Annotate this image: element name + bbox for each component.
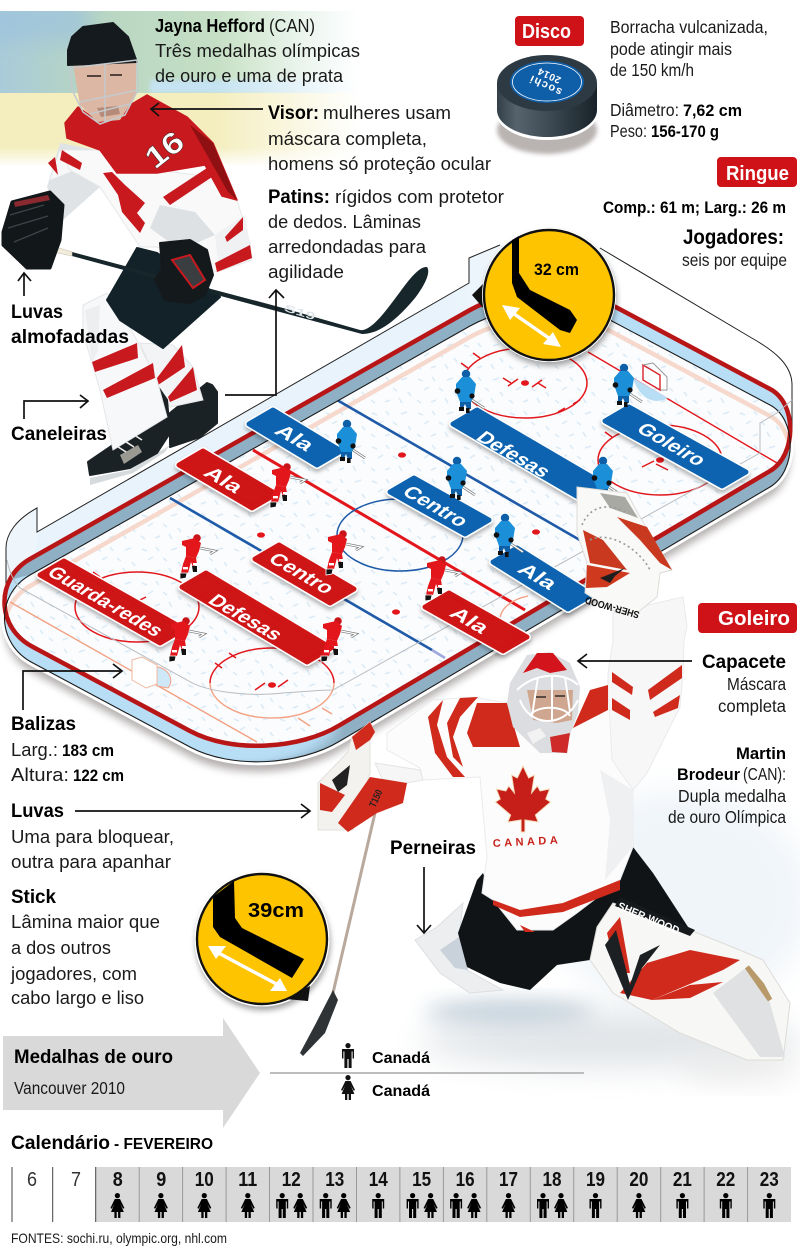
text: Patins (268, 186, 504, 282)
text: Stick: cabo largo e liso (11, 987, 144, 1008)
text: Capacete (702, 651, 786, 716)
badge: Disco: Disco (522, 21, 571, 43)
text: Stick: Stick (11, 886, 56, 908)
day 18: 18 (542, 1169, 562, 1191)
rink labels (40, 407, 746, 662)
label: Centro (red): Centro (263, 549, 339, 598)
text: Capacete: Capacete (702, 651, 786, 673)
left leg (83, 293, 167, 450)
face-off circles (75, 348, 722, 690)
day 16 (450, 1169, 481, 1218)
arrow: skates (225, 290, 284, 395)
text: Stick: jogadores, com (10, 963, 137, 984)
text: Patins: de dedos. Lâminas (268, 211, 421, 232)
blue team players (336, 364, 642, 557)
rink glass enclosure (6, 245, 792, 620)
day 16: 16 (456, 1169, 475, 1191)
text: Balizas: 183 cm (62, 741, 114, 760)
label: Ala (blue top) (249, 410, 341, 465)
stick blade callout: 32 cm (472, 228, 616, 362)
text: players: Jogadores: (683, 226, 784, 249)
text: Patins: rígidos com protetor (335, 186, 504, 207)
text: puck description: 7,62 cm (683, 101, 742, 120)
goal creases (633, 378, 668, 401)
blue lines (170, 498, 432, 650)
text: Jayna Hefford: Jayna Hefford (155, 16, 265, 36)
text: Martin Brodeur: Dupla medalha (678, 786, 786, 806)
label: Ala (red bottom) (425, 593, 527, 651)
goal lines (588, 352, 777, 463)
gold medals arrow panel: Vancouver 2010 (14, 1078, 125, 1098)
rink rim (4, 291, 790, 746)
badge: Goleiro (698, 603, 797, 633)
text: Jayna Hefford: Três medalhas olímpicas (155, 40, 360, 61)
day 9 (154, 1169, 168, 1218)
left glove (3, 192, 63, 268)
text: Jayna Hefford: de ouro e uma de prata (155, 65, 344, 86)
day 11: 11 (238, 1169, 257, 1191)
day 19 (586, 1169, 605, 1218)
arrow: gloves (18, 273, 31, 296)
text: Balizas: Larg.: (11, 739, 58, 760)
ice shadows (420, 790, 800, 1079)
rink boards (4, 291, 790, 762)
puck logo: sochi (528, 72, 564, 98)
blocker glove: T150 (368, 788, 385, 809)
text: Jayna Hefford: (CAN) (269, 15, 315, 36)
day 17 (499, 1169, 518, 1218)
arrow: goalie gloves (75, 804, 310, 818)
text: Patins: Patins: (268, 186, 330, 208)
day 9: 9 (156, 1169, 166, 1191)
day 7: 7 (71, 1169, 81, 1191)
text: Stick (10, 886, 160, 1008)
badge: Ringue: Ringue (726, 163, 789, 185)
badge: Ringue (717, 157, 797, 187)
text: Stick: Lâmina maior que (11, 911, 160, 932)
day 15: 15 (412, 1169, 431, 1191)
goalie stick (300, 813, 375, 1056)
text: puck description: Diâmetro: (610, 100, 679, 120)
mask (507, 652, 580, 753)
right leg pad: SHER-WOOD (616, 900, 681, 937)
label: Ala (blue top): Ala (269, 421, 320, 455)
calendar (12, 1167, 791, 1222)
text: puck description: de 150 km/h (610, 60, 694, 80)
sources: FONTES: sochi.ru, olympic.org, nhl.com (11, 1230, 227, 1246)
text: Capacete: Máscara (727, 674, 786, 694)
day 17: 17 (499, 1169, 518, 1191)
day 13 (320, 1169, 351, 1218)
label: Ala (blue bottom): Ala (512, 560, 563, 594)
text: Capacete: completa (718, 696, 786, 716)
right glove (155, 240, 213, 303)
text: Visor: homens só proteção ocular (268, 153, 491, 174)
text: puck description: Borracha vulcanizada, (610, 17, 768, 37)
calendar heading (11, 1132, 213, 1154)
calendar heading: - FEVEREIRO (114, 1136, 213, 1153)
day 21 (673, 1169, 692, 1218)
chest maple leaf (103, 172, 145, 233)
puck logo (510, 61, 584, 103)
text: Luvas goalie (11, 800, 174, 872)
day 19: 19 (586, 1169, 605, 1191)
photo: skater Jayna Hefford: S19 (283, 303, 317, 323)
day 23: 23 (760, 1169, 779, 1191)
raised sleeve (600, 597, 687, 847)
text: Luvas almofadadas: Luvas (11, 301, 63, 323)
text: Visor: mulheres usam (323, 102, 451, 123)
text: Patins: agilidade (268, 261, 344, 282)
badge: Disco (515, 16, 584, 46)
text: Visor: máscara completa, (268, 128, 427, 149)
gold medal winners (270, 1043, 584, 1100)
text: Balizas (11, 713, 124, 785)
photo: goalie Martin Brodeur (300, 487, 800, 1079)
day 21: 21 (673, 1169, 692, 1191)
text: Luvas almofadadas (11, 301, 129, 348)
center circle (337, 499, 463, 571)
day 11 (238, 1169, 257, 1218)
label: Goleiro (blue) (605, 407, 746, 486)
label: Ala (red top): Ala (198, 463, 249, 497)
blocker glove (318, 722, 423, 832)
pants (458, 847, 690, 990)
text: Balizas: 122 cm (73, 766, 124, 785)
day 14 (369, 1169, 388, 1218)
goal net left (132, 657, 157, 688)
text: Luvas goalie: Luvas (11, 800, 64, 822)
badge: Goleiro: Goleiro (718, 608, 790, 630)
day 23 (760, 1169, 779, 1218)
jersey white body (60, 150, 252, 272)
day 6: 6 (27, 1169, 37, 1191)
text: Martin Brodeur: (CAN): (743, 764, 786, 784)
text: Stick: a dos outros (11, 937, 111, 958)
text: players (682, 226, 787, 270)
label: Defesas (blue): Defesas (471, 428, 556, 481)
right leg pad (590, 897, 790, 1060)
right skate (170, 383, 217, 447)
label: Centro (red) (255, 545, 354, 603)
jersey red yoke (65, 95, 237, 200)
left leg pad (415, 903, 503, 993)
text: Martin Brodeur: Martin (736, 744, 786, 763)
label: Centro (blue): Centro (397, 482, 473, 531)
arrow: helmet (578, 654, 692, 668)
text: Luvas goalie: Uma para bloquear, (11, 826, 174, 847)
stick blade callout: 32 cm: 32 cm (534, 260, 579, 279)
text: Patins: arredondadas para (268, 236, 427, 257)
text: puck description: Peso: (610, 121, 647, 141)
arrow: leg pads (417, 867, 431, 933)
stick blade callout: 39cm: 39cm (248, 900, 304, 922)
text: Luvas almofadadas: almofadadas (11, 326, 129, 348)
right leg (140, 343, 203, 407)
stick blade callout: 39cm (194, 872, 330, 1006)
day 20 (629, 1169, 648, 1218)
neutral zone dots (257, 380, 664, 688)
red team players (169, 463, 460, 662)
text: Luvas goalie: outra para apanhar (11, 851, 171, 872)
text: Jayna Hefford (155, 15, 360, 86)
text: players: seis por equipe (682, 250, 787, 270)
label: Defesas (blue) (453, 410, 602, 497)
day 20: 20 (629, 1169, 648, 1191)
day 8 (110, 1169, 124, 1218)
text: Martin Brodeur: de ouro Olímpica (668, 807, 786, 827)
center red line (253, 450, 525, 610)
puck (495, 55, 599, 154)
trapper glove: SHER-WOOD (584, 594, 641, 620)
text: puck description (610, 17, 768, 141)
trapper glove (577, 487, 672, 620)
day 12 (276, 1169, 307, 1218)
day 10: 10 (195, 1169, 214, 1191)
left skate (90, 445, 170, 485)
label: Ala (red bottom): Ala (444, 604, 495, 638)
text: puck description: pode atingir mais (610, 39, 732, 59)
jersey number: 16 (139, 125, 191, 176)
day 15 (407, 1169, 438, 1218)
photo: skater Jayna Hefford (3, 23, 428, 485)
gold medal winners: Canadá (372, 1083, 430, 1100)
arrow: shin guards (24, 395, 88, 419)
day 18 (537, 1169, 568, 1218)
arrow: goals (23, 664, 122, 710)
calendar heading: Calendário (11, 1132, 110, 1154)
label: Ala (blue bottom) (493, 548, 592, 609)
puck logo: 2014 (536, 65, 563, 85)
stick (72, 252, 428, 334)
text: Martin Brodeur: Brodeur (677, 765, 740, 784)
text: Perneiras: Perneiras (390, 837, 476, 859)
text: Balizas: Balizas (11, 713, 76, 735)
front glass line (7, 400, 792, 694)
day 10 (195, 1169, 214, 1218)
pants (107, 248, 220, 348)
day 22 (716, 1169, 735, 1218)
label: Goleiro (blue): Goleiro (632, 419, 711, 470)
text: Balizas: Altura: (11, 764, 69, 785)
jersey stripes (48, 150, 252, 272)
day 22: 22 (716, 1169, 735, 1191)
gold medal winners: Canadá (372, 1050, 430, 1067)
day 8: 8 (113, 1169, 123, 1191)
day 14: 14 (369, 1169, 388, 1191)
jersey (387, 665, 682, 932)
rink diagram (0, 240, 800, 780)
text: Martin Brodeur (668, 744, 786, 827)
text: Visor: Visor: (268, 102, 319, 124)
label: Guarda-redes: Guarda-redes (42, 563, 168, 640)
gold medals arrow panel: Medalhas de ouro (14, 1046, 173, 1068)
label: Centro (blue) (390, 478, 489, 534)
arrow: visor (151, 103, 263, 116)
text: Caneleiras: Caneleiras (11, 423, 107, 445)
text: puck description: 156-170 g (651, 122, 719, 141)
label: Defesas (red): Defesas (203, 591, 288, 644)
helmet and cage (68, 23, 138, 124)
photo background: arena behind skater (0, 11, 341, 164)
jersey wordmark: CANADA (493, 835, 558, 850)
day 12: 12 (282, 1169, 301, 1191)
text: Visor (268, 102, 491, 174)
label: Ala (red top) (179, 451, 276, 508)
left arm (47, 143, 100, 220)
goal net right (643, 363, 667, 390)
ice surface and markings (7, 319, 788, 744)
jersey stripes (428, 665, 682, 932)
gold medals arrow panel (3, 1018, 260, 1128)
day 13: 13 (325, 1169, 344, 1191)
jersey shoulder red (467, 703, 520, 747)
jersey maple leaf (495, 766, 551, 832)
label: Defesas (red) (182, 573, 331, 662)
